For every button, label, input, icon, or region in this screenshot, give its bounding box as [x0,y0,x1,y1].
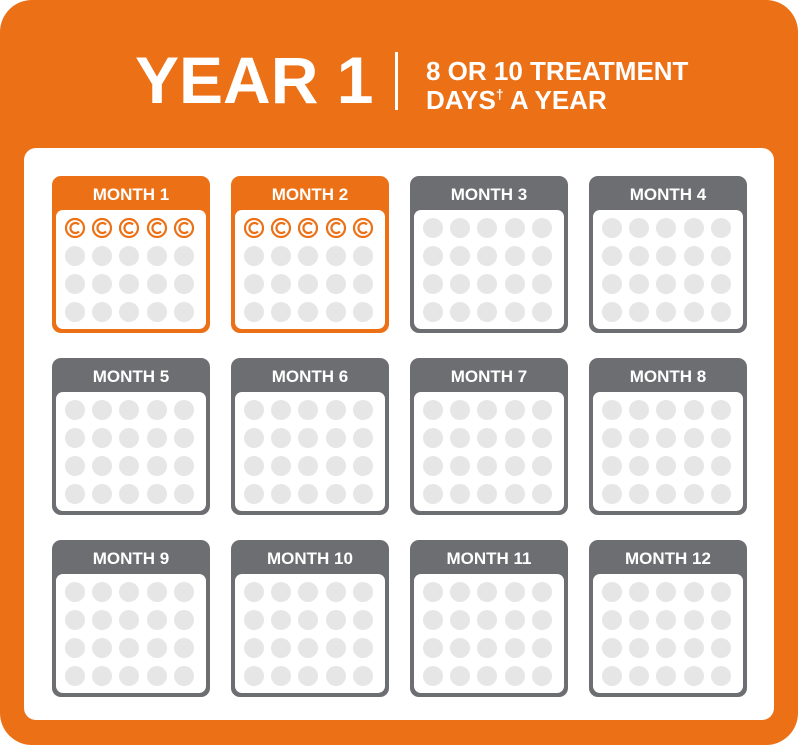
title [135,43,689,117]
month 4 [589,176,747,333]
month 2 [231,176,389,333]
month 7 [410,358,568,515]
month 6 [231,358,389,515]
title: DAYS [426,85,496,115]
month 8: MONTH 8 [630,367,706,386]
month 6: MONTH 6 [272,367,348,386]
title: † [496,86,504,102]
month 12: MONTH 12 [625,549,711,568]
month 12 [589,540,747,697]
month 10: MONTH 10 [267,549,353,568]
month 3: MONTH 3 [451,185,527,204]
month 11 [410,540,568,697]
month 8 [589,358,747,515]
month 5: MONTH 5 [93,367,169,386]
title: 8 OR 10 TREATMENT [426,56,689,86]
month 1: MONTH 1 [93,185,169,204]
month 3 [410,176,568,333]
month 1 [52,176,210,333]
month 7: MONTH 7 [451,367,527,386]
title: A YEAR [504,85,607,115]
calendar panel [24,148,774,720]
month 11: MONTH 11 [446,549,532,568]
title: YEAR 1 [135,43,373,117]
month 9: MONTH 9 [93,549,169,568]
month 2: MONTH 2 [272,185,348,204]
month 4: MONTH 4 [630,185,707,204]
month 10 [231,540,389,697]
month 5 [52,358,210,515]
month 9 [52,540,210,697]
